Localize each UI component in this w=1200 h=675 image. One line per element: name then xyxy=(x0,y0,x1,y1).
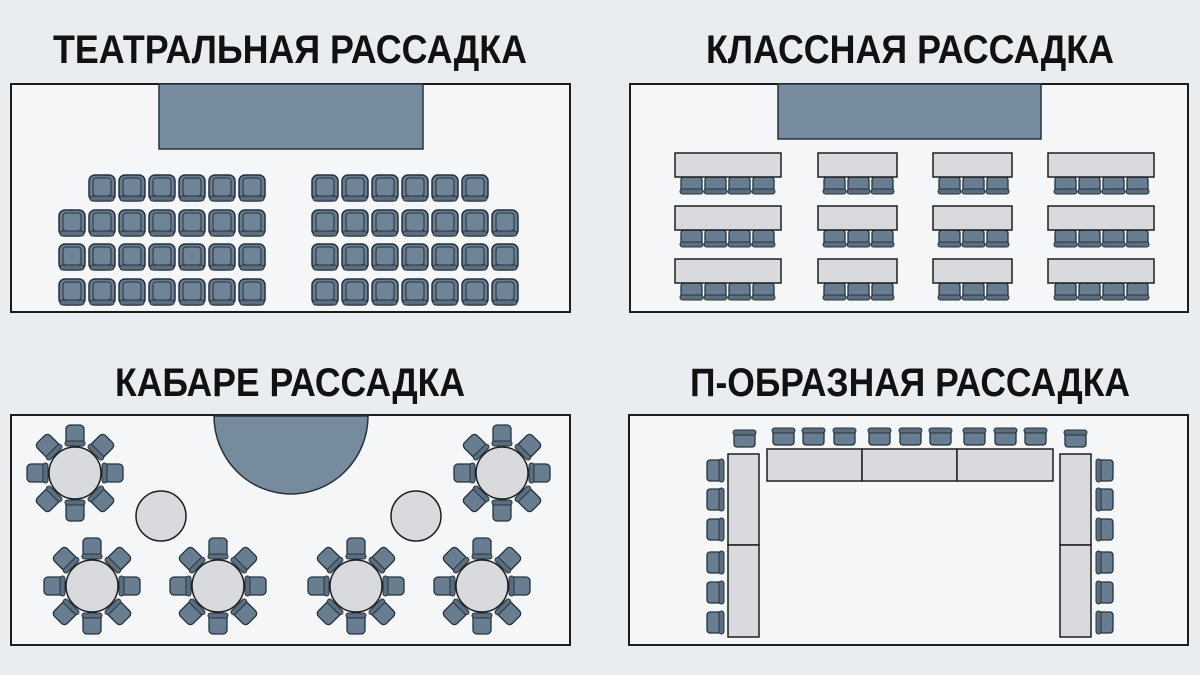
chairs right block xyxy=(312,175,518,305)
stage xyxy=(778,84,1041,139)
round tables xyxy=(27,425,550,634)
panel: theatre seating xyxy=(11,84,570,312)
panel: cabaret seating xyxy=(11,415,570,645)
panel: classroom seating xyxy=(630,84,1188,312)
tables xyxy=(728,449,1091,637)
chairs left block xyxy=(59,175,265,305)
panel: U-shape seating xyxy=(629,415,1188,645)
title: theatre: ТЕАТРАЛЬНАЯ РАССАДКА xyxy=(53,28,527,72)
title: cabaret: КАБАРЕ РАССАДКА xyxy=(115,361,465,405)
title: U-shape: П-ОБРАЗНАЯ РАССАДКА xyxy=(690,361,1130,405)
top chairs xyxy=(733,428,1087,447)
side chairs xyxy=(707,459,1113,634)
stage semicircle xyxy=(214,416,368,494)
desks and chairs xyxy=(675,153,1154,300)
title: classroom: КЛАССНАЯ РАССАДКА xyxy=(706,28,1114,72)
stage xyxy=(159,84,423,149)
